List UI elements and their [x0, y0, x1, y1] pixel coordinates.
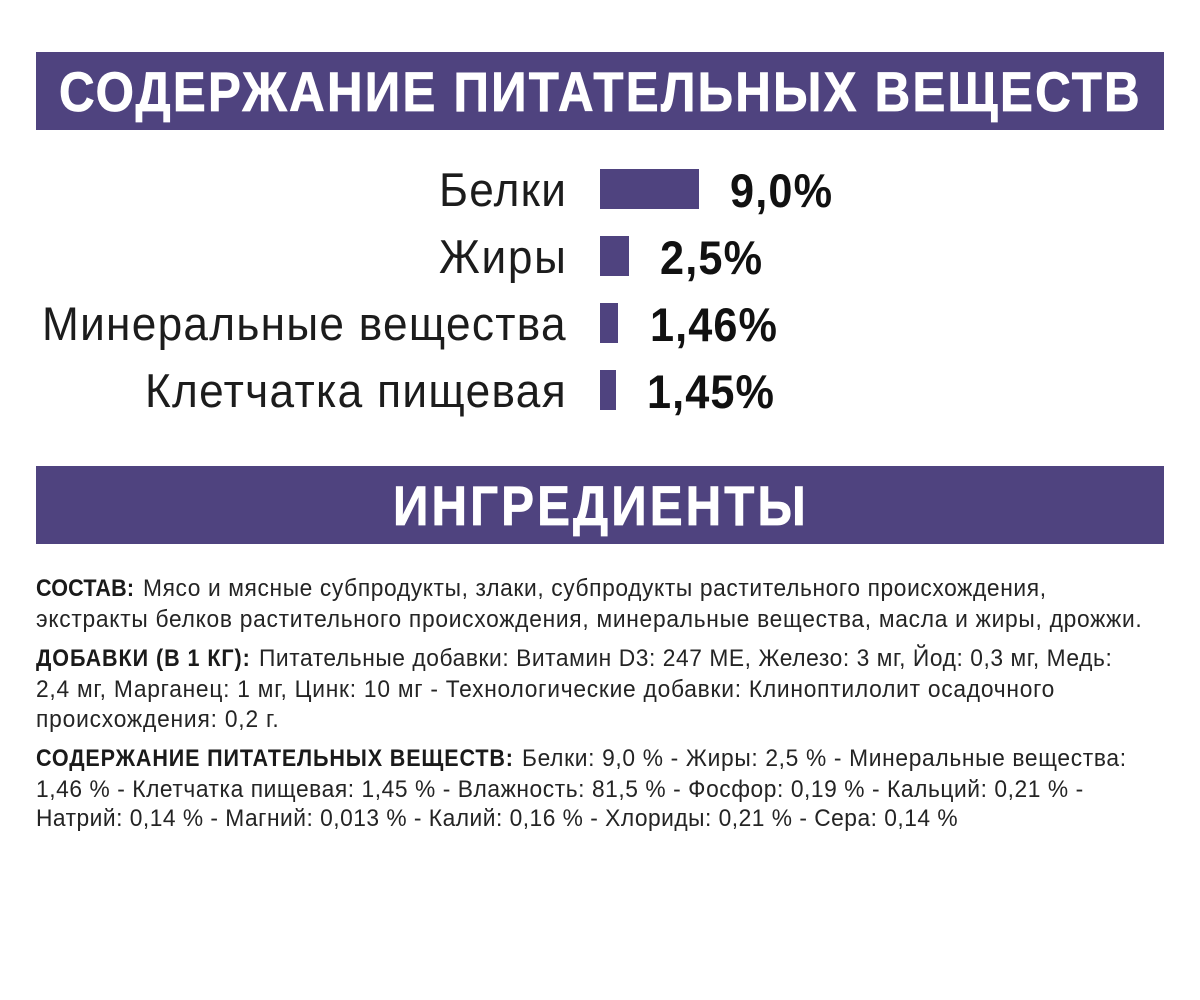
- heading band: ingredients: ИНГРЕДИЕНТЫ: [393, 475, 806, 538]
- heading band: ingredients: [36, 466, 1164, 544]
- label: fibre: Клетчатка пищевая: [145, 365, 566, 417]
- label: minerals: Минеральные вещества: [42, 298, 566, 350]
- heading band: nutrients: СОДЕРЖАНИЕ ПИТАТЕЛЬНЫХ ВЕЩЕСТВ: [59, 61, 1140, 124]
- text block: composition: Мясо и мясные субпродукты, злаки, субпродукты растительного происхождения,: [143, 575, 1046, 602]
- text block: nutrient content: 1,46 % - Клетчатка пищевая: 1,45 % - Влажность: 81,5 % - Фосфор: 0,19 % - Кальций: 0,21 % -: [36, 776, 1083, 803]
- value: minerals: 1,46%: [650, 298, 777, 351]
- text block: additives: [36, 643, 1112, 733]
- text block: additives: 2,4 мг, Марганец: 1 мг, Цинк: 10 мг - Технологические добавки: Клиноптилолит осадочного: [36, 676, 1054, 703]
- text block: nutrient content: Белки: 9,0 % - Жиры: 2,5 % - Минеральные вещества:: [522, 745, 1126, 772]
- text block: nutrient content: СОДЕРЖАНИЕ ПИТАТЕЛЬНЫХ ВЕЩЕСТВ:: [36, 744, 513, 771]
- text block: nutrient content: Натрий: 0,14 % - Магний: 0,013 % - Калий: 0,16 % - Хлориды: 0,21 % - Сера: 0,14 %: [36, 805, 958, 832]
- text block: composition: СОСТАВ:: [36, 574, 134, 601]
- text block: composition: экстракты белков растительного происхождения, минеральные вещества, масла и жиры, дрожжи.: [36, 606, 1142, 633]
- text block: nutrient content: [36, 744, 1126, 832]
- bar: fat: [600, 236, 629, 276]
- text block: composition: [36, 574, 1142, 633]
- bar: minerals: [600, 303, 618, 343]
- value: protein: 9,0%: [730, 164, 832, 217]
- bar: protein: [600, 169, 699, 209]
- value: fibre: 1,45%: [647, 365, 774, 418]
- label: protein: Белки: [439, 164, 566, 216]
- text block: additives: Питательные добавки: Витамин D3: 247 МЕ, Железо: 3 мг, Йод: 0,3 мг, Медь:: [259, 643, 1112, 672]
- label: fat: Жиры: [439, 231, 566, 283]
- text block: additives: происхождения: 0,2 г.: [36, 706, 279, 733]
- text block: additives: ДОБАВКИ (В 1 КГ):: [36, 644, 250, 671]
- value: fat: 2,5%: [660, 231, 762, 284]
- bar: fibre: [600, 370, 616, 410]
